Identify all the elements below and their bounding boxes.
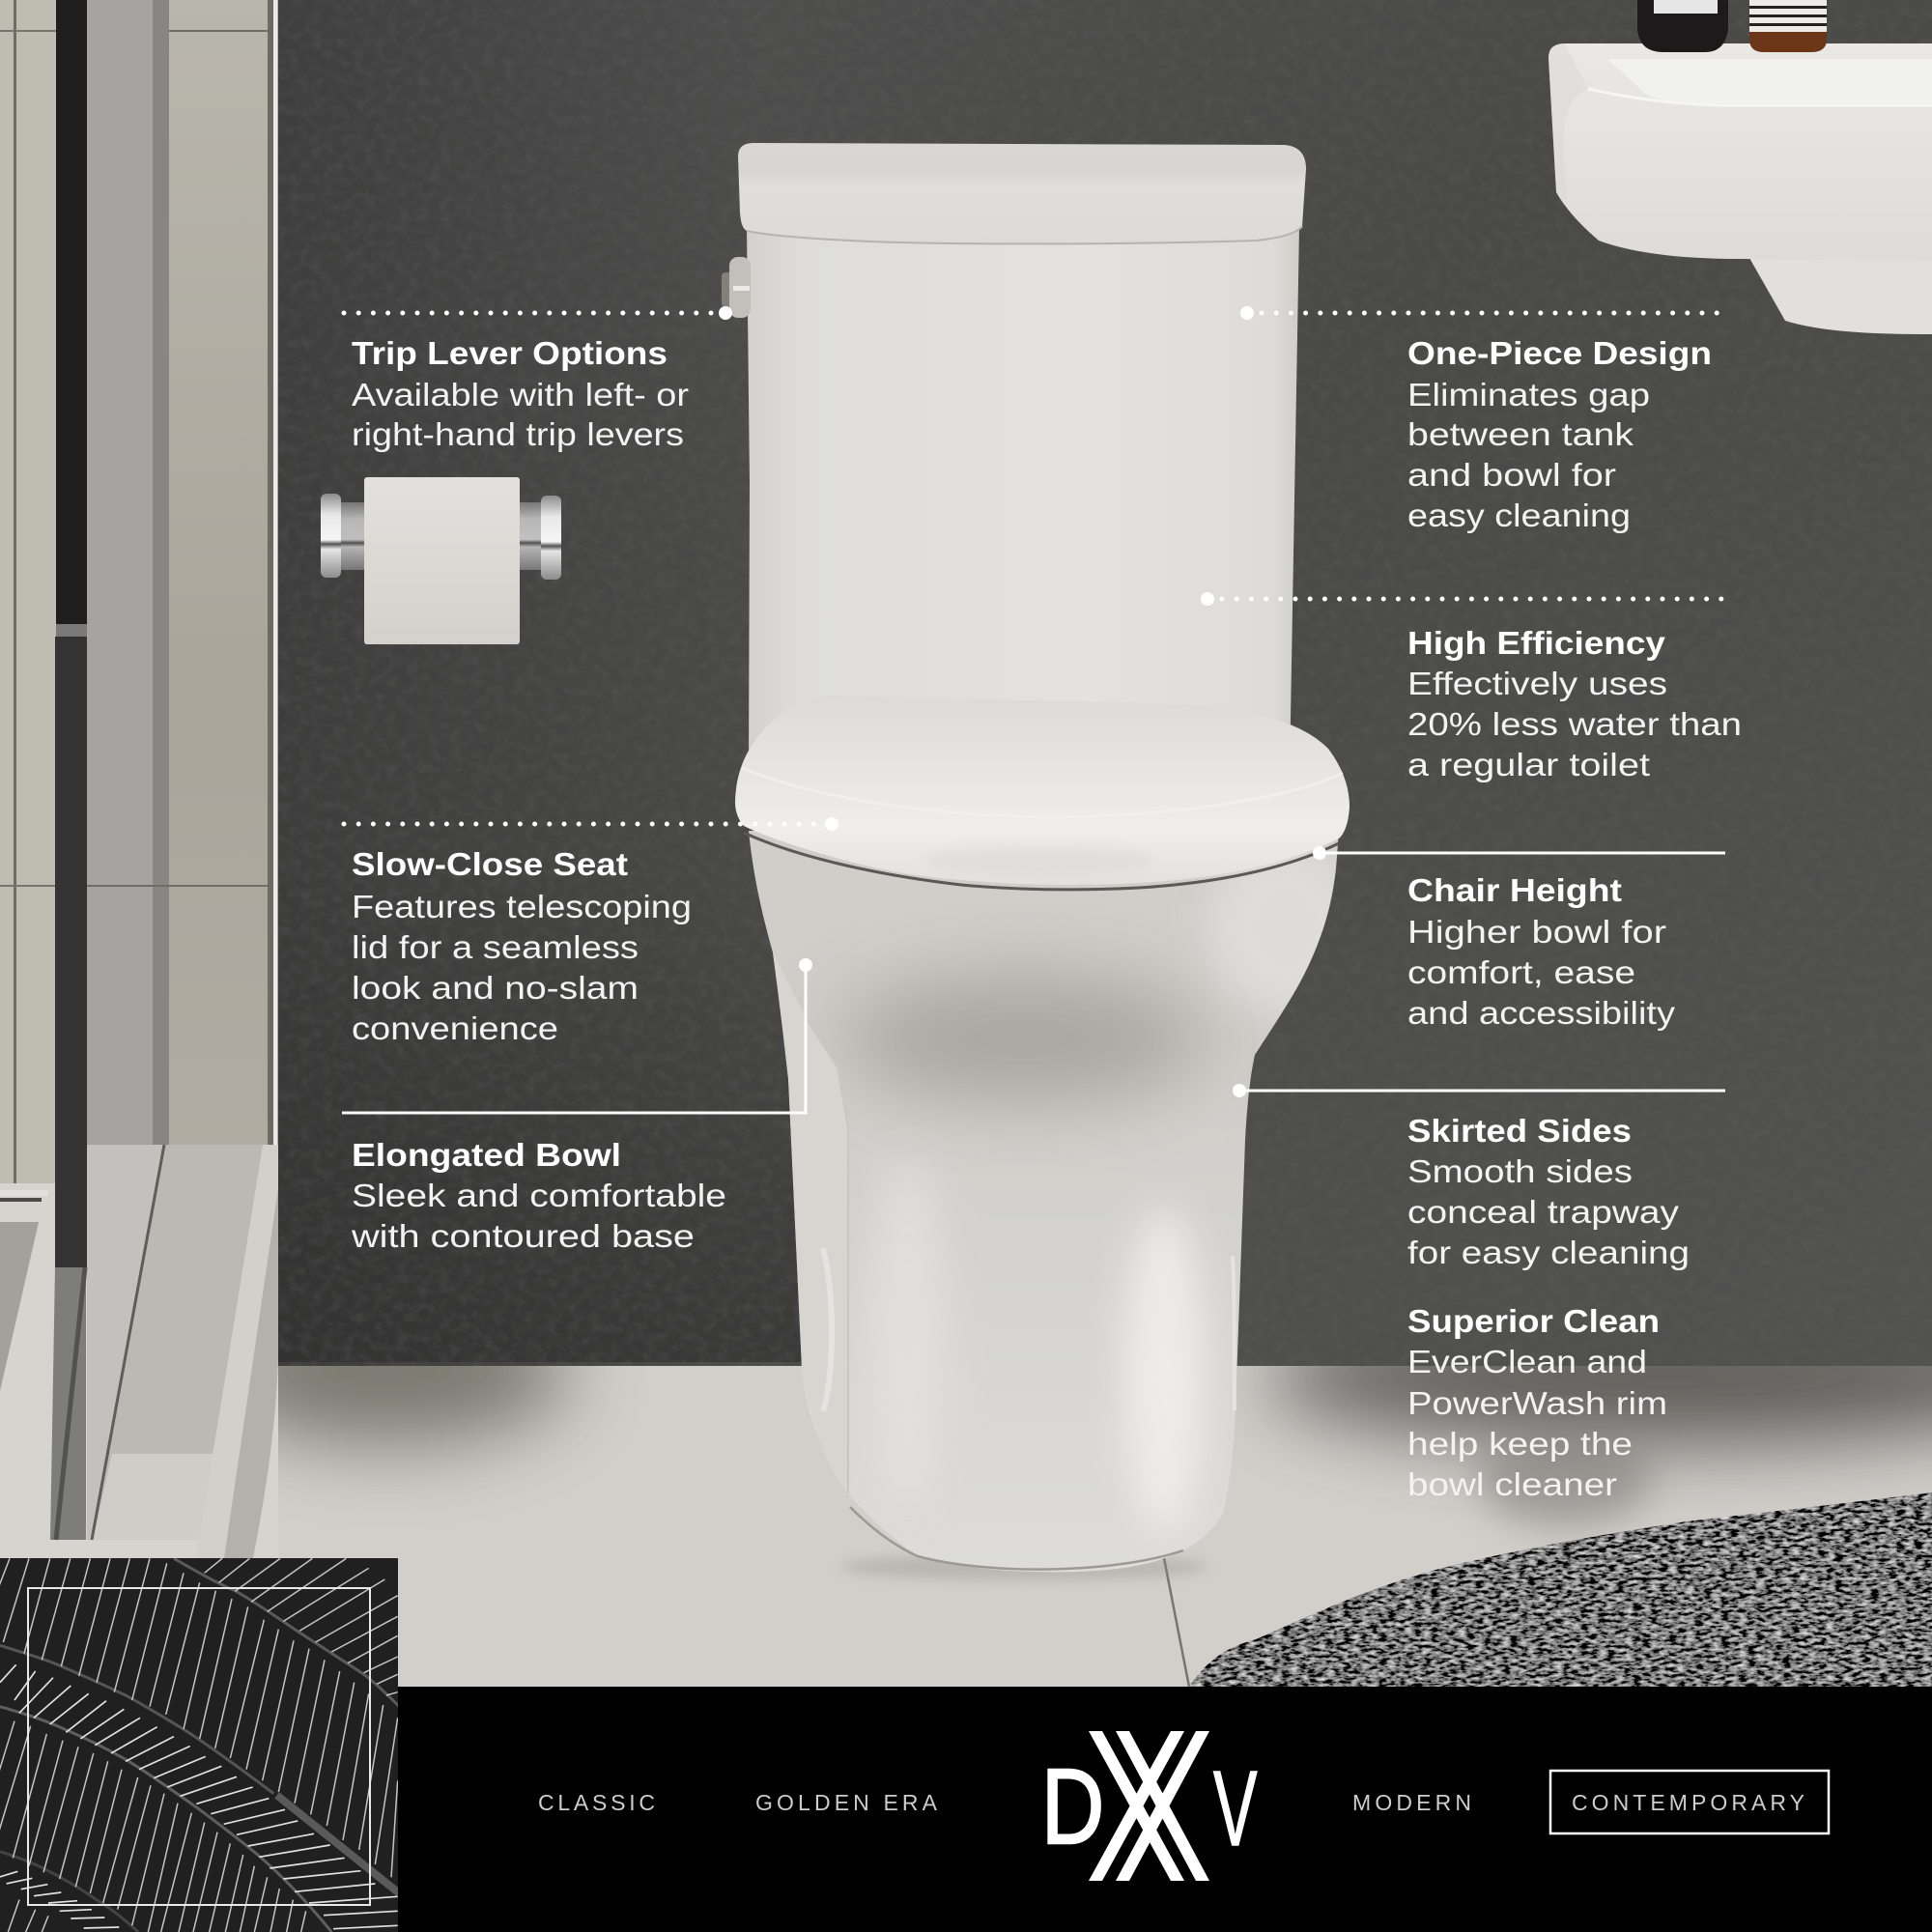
floor [193,1299,1932,1690]
callout: superior clean: bowl cleaner [1407,1466,1617,1502]
callout: slow-close seat: look and no-slam [352,970,639,1006]
callout: slow-close seat: lid for a seamless [352,929,639,965]
callout leader: high efficiency [1201,592,1725,606]
callout: chair height: Chair Height [1407,872,1622,908]
textured charcoal wall [270,0,1932,1366]
callout: chair height: and accessibility [1407,995,1676,1031]
callout: trip lever options: right-hand trip levers [352,416,684,452]
callout: chair height [1407,872,1676,1031]
toilet paper holder [321,477,561,644]
callout: trip lever options: Available with left- or [352,377,689,412]
panel: brand footer [398,1687,1932,1932]
callout: high efficiency [1407,625,1742,782]
callout: one-piece design: easy cleaning [1407,497,1631,533]
logo: DXV: V [1213,1749,1257,1868]
callout leader: chair height [1313,846,1725,860]
toilet: slow-close seat [735,696,1350,890]
toilet shadow on floor [840,1553,1208,1580]
callout: trip lever options [352,335,689,452]
callout: slow-close seat [352,846,692,1046]
callout: high efficiency: 20% less water than [1407,706,1742,742]
callout: skirted sides: Smooth sides [1407,1153,1633,1189]
callout: superior clean: EverClean and [1407,1344,1647,1379]
callout: slow-close seat: convenience [352,1010,558,1046]
callout: superior clean: Superior Clean [1407,1303,1660,1339]
woven rug [1179,1488,1932,1690]
callout: skirted sides: Skirted Sides [1407,1113,1632,1149]
callout: one-piece design: between tank [1407,416,1634,452]
callout: elongated bowl: Sleek and comfortable [352,1178,726,1213]
callout: elongated bowl [351,1137,726,1254]
line art frame [28,1588,370,1905]
callout: high efficiency: High Efficiency [1407,625,1666,661]
nav label: modern: MODERN [1352,1790,1471,1815]
callout leader: slow-close seat [344,817,838,831]
panel: architectural line art [0,1558,399,1932]
callout: elongated bowl: Elongated Bowl [352,1137,621,1173]
callout: one-piece design [1407,335,1712,533]
callout: high efficiency: Effectively uses [1407,666,1667,701]
logo: DXV: D [1041,1748,1104,1866]
callout: high efficiency: a regular toilet [1407,747,1650,782]
callout leader: one-piece design [1240,306,1725,320]
callout: one-piece design: and bowl for [1407,457,1616,493]
callout leader: skirted sides [1233,1084,1725,1097]
shower enclosure and tile wall [0,0,278,1558]
nav label: contemporary (selected): CONTEMPORARY [1572,1790,1804,1815]
callout: trip lever options: Trip Lever Options [352,335,668,371]
callout leader: trip lever [344,306,732,320]
callout: elongated bowl: with contoured base [351,1218,695,1254]
callout: one-piece design: Eliminates gap [1407,377,1650,412]
callout: skirted sides: conceal trapway [1407,1194,1680,1230]
toilet: bowl and skirted base [749,831,1362,1572]
callout: superior clean [1407,1303,1667,1502]
callout: slow-close seat: Slow-Close Seat [352,846,628,882]
bottles on sink [1637,0,1827,52]
toilet trip lever [722,257,751,318]
callout: slow-close seat: Features telescoping [352,889,692,924]
wall sink [1548,43,1932,334]
callout: chair height: comfort, ease [1407,954,1635,990]
nav label: classic: CLASSIC [538,1790,655,1815]
logo: DXV [1041,1731,1257,1881]
toilet: tank [738,143,1306,773]
callout: one-piece design: One-Piece Design [1407,335,1712,371]
callout: skirted sides: for easy cleaning [1407,1235,1690,1270]
callout: chair height: Higher bowl for [1407,914,1666,950]
nav label: golden era: GOLDEN ERA [755,1790,938,1815]
callout leader: elongated bowl [342,958,812,1113]
nav label: contemporary (selected) [1550,1771,1829,1833]
callout: skirted sides [1407,1113,1690,1270]
callout: superior clean: PowerWash rim [1407,1385,1667,1421]
callout: superior clean: help keep the [1407,1426,1633,1462]
